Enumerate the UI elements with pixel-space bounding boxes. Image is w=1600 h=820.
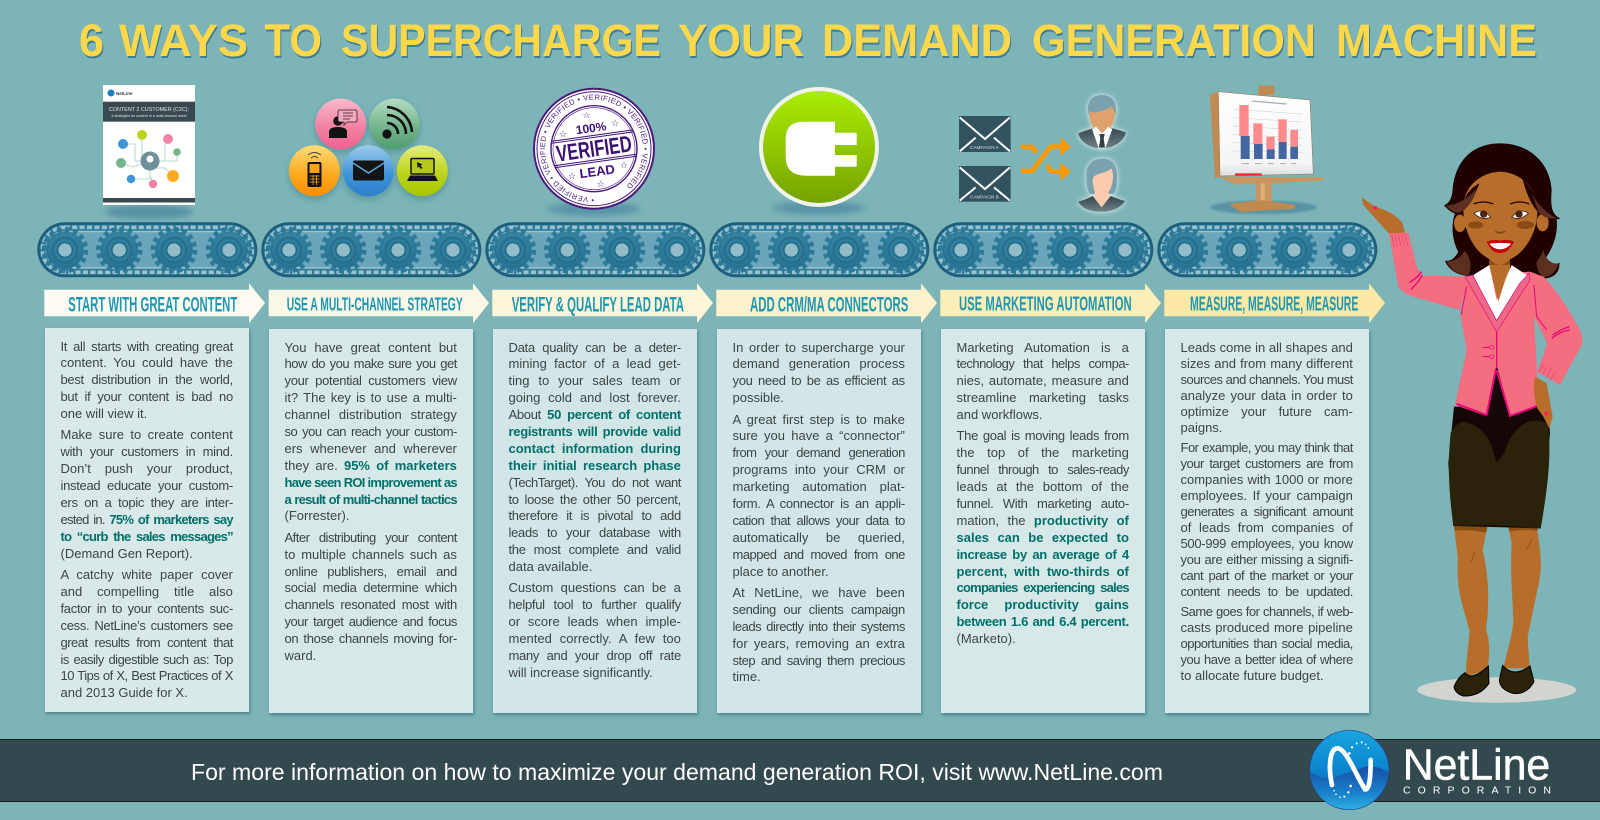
panel: add crm/ma connectors: time. — [732, 669, 761, 684]
panel: measure, measure, measure: companies with 1000 or more — [1180, 472, 1353, 486]
icon: social bubble — [315, 98, 366, 150]
panel: add crm/ma connectors: possible. — [732, 390, 784, 405]
title: TO — [264, 15, 322, 66]
panel: measure, measure, measure: 500-999 employees, you know — [1180, 536, 1353, 550]
panel: use a multi-channel strategy: online publishers, email and — [284, 564, 457, 579]
title: YOUR — [678, 15, 804, 66]
panel: verify and qualify lead data: to loose the other 50 percent, — [508, 492, 681, 507]
icon: chart easel — [1210, 86, 1323, 214]
panel: start with great content: A catchy white paper cover — [60, 567, 233, 582]
panel: use a multi-channel strategy: a result of multi-channel tactics — [284, 492, 457, 507]
title: GENERATION — [1032, 15, 1316, 66]
arrow heading: use a multi-channel strategy — [269, 283, 489, 323]
panel: use marketing automation: (Marketo). — [956, 631, 1016, 646]
panel: add crm/ma connectors: sure you have a “connector” — [732, 428, 905, 443]
panel: add crm/ma connectors: demand generation process — [732, 356, 905, 371]
arrow heading: add crm/ma connectors — [716, 283, 937, 323]
title — [79, 15, 1537, 66]
panel: measure, measure, measure: you have a better idea of where — [1180, 652, 1353, 666]
panel: add crm/ma connectors: A great first step is to make — [732, 412, 905, 427]
panel: measure, measure, measure: you are either missing a signifi- — [1180, 552, 1353, 566]
panel: start with great content: best distribution in the world, — [60, 372, 233, 387]
arrow heading: measure, measure, measure: MEASURE, MEASURE, MEASURE — [1190, 294, 1358, 316]
icon: verified lead stamp: 100% — [575, 119, 608, 137]
panel: verify and qualify lead data: ting to your sales team or — [508, 373, 681, 388]
panel: add crm/ma connectors: mapped and moved from one — [732, 547, 905, 562]
panel: add crm/ma connectors — [717, 329, 921, 713]
title: SUPERCHARGE — [341, 15, 661, 66]
panel: add crm/ma connectors: programs into your CRM or — [732, 462, 905, 477]
panel: use marketing automation: leads at the bottom of the — [956, 479, 1129, 494]
panel: start with great content: cess. NetLine’s customers see — [60, 618, 233, 633]
panel: start with great content: and compelling title also — [60, 584, 233, 599]
face — [1446, 172, 1558, 277]
icon: email bubble — [343, 145, 394, 196]
icon: verified lead stamp: LEAD — [579, 161, 616, 181]
panel: verify and qualify lead data: going cold and lost forever. — [508, 390, 681, 405]
arrow heading: measure, measure, measure — [1164, 283, 1385, 323]
panel: verify and qualify lead data: their initial research phase — [508, 458, 681, 473]
panel: measure, measure, measure: opportunities than social media, — [1180, 636, 1353, 650]
panel: use a multi-channel strategy: You have great content but — [284, 340, 457, 354]
logo wordmark: NetLine — [1403, 740, 1550, 789]
panel: use marketing automation: mation, the productivity of — [956, 513, 1129, 528]
panel: start with great content: It all starts with creating great — [60, 338, 233, 354]
arrow heading: start with great content: START WITH GREAT CONTENT — [68, 294, 237, 317]
arrow heading: use marketing automation: USE MARKETING AUTOMATION — [959, 293, 1132, 316]
panel: use marketing automation: streamline marketing tasks — [956, 390, 1129, 405]
panel: add crm/ma connectors: for years, removing an extra — [732, 636, 905, 651]
panel: use a multi-channel strategy: your target audience and focus — [284, 614, 457, 629]
icon: white paper cover: CONTENT 2 CUSTOMER (C2C): — [109, 107, 189, 113]
icon: woman — [1078, 159, 1125, 212]
panel: start with great content: ers on a topic they are inter- — [60, 495, 233, 510]
panel: use marketing automation: between 1.6 and 6.4 percent. — [956, 614, 1129, 629]
panel: verify and qualify lead data: helpful tool to further qualify — [508, 597, 681, 612]
panel: add crm/ma connectors: step and saving them precious — [732, 653, 905, 668]
icon: verified lead stamp: ☆ — [568, 172, 576, 182]
title: DEMAND — [822, 15, 1012, 66]
jacket — [1455, 272, 1582, 417]
panel: verify and qualify lead data: Data quality can be a deter- — [508, 340, 681, 354]
icon: white paper cover: 3 strategies for content in a multi-channel world — [111, 114, 187, 118]
panel: measure, measure, measure: optimize your future cam- — [1180, 404, 1353, 418]
panel: measure, measure, measure: employees. If your campaign — [1180, 488, 1353, 502]
conveyor: step 1 — [37, 222, 257, 277]
icon: channel bubbles — [288, 98, 448, 200]
panel: measure, measure, measure: paigns. — [1180, 420, 1222, 434]
panel: start with great content: with your customers in mind. — [60, 444, 233, 459]
panel: verify and qualify lead data: many and your drop off rate — [508, 648, 681, 663]
panel: use marketing automation: force productivity gains — [956, 597, 1129, 612]
arrow heading: use a multi-channel strategy: USE A MULTI-CHANNEL STRATEGY — [287, 294, 463, 315]
panel: use marketing automation: and workflows. — [956, 407, 1042, 422]
panel: measure, measure, measure — [1165, 329, 1369, 713]
panel: use marketing automation: companies experiencing sales — [956, 580, 1129, 595]
panel: use a multi-channel strategy: how do you make sure you get — [284, 356, 457, 371]
icon: verified lead stamp: ☆ — [559, 130, 567, 140]
icon: white paper cover: NetLine — [116, 91, 133, 96]
panel: add crm/ma connectors: from your demand generation — [732, 445, 905, 460]
panel: verify and qualify lead data: registrants will provide valid — [508, 424, 681, 439]
logo: NetLine — [1310, 730, 1551, 810]
panel: use a multi-channel strategy: they are. 95% of marketers — [284, 458, 457, 473]
icon: verified lead stamp: ☆ — [582, 111, 591, 121]
panel: use a multi-channel strategy: to multiple channels such as — [284, 547, 457, 562]
panel: verify and qualify lead data: contact information during — [508, 441, 681, 456]
panel: verify and qualify lead data: the most complete and valid — [508, 542, 681, 557]
panel: use marketing automation: nies, automate, measure and — [956, 373, 1129, 388]
panel: start with great content: content. You could have the — [60, 355, 233, 370]
arrow heading: add crm/ma connectors: ADD CRM/MA CONNECTORS — [750, 294, 908, 317]
panel: verify and qualify lead data: mented correctly. A few too — [508, 631, 681, 646]
panel: measure, measure, measure: analyze your data in order to — [1180, 388, 1353, 402]
panel: measure, measure, measure: casts produced more pipeline — [1180, 620, 1353, 634]
panel: use marketing automation: funnel. With marketing auto- — [956, 496, 1129, 511]
panel: start with great content: to “curb the sales messages” — [60, 529, 233, 544]
icon: campaign A envelope: CAMPAIGN A — [970, 145, 1000, 150]
icon: verified lead stamp: ☆ — [596, 180, 605, 190]
icon: campaign B envelope: CAMPAIGN B — [970, 195, 999, 200]
panel: measure, measure, measure: of leads from companies of — [1180, 520, 1353, 534]
panel: start with great content: one will view it. — [60, 406, 147, 421]
panel: start with great content: and 2013 Guide for X. — [60, 685, 188, 700]
panel: verify and qualify lead data: or score leads when imple- — [508, 614, 681, 629]
arm raised — [1362, 197, 1467, 310]
panel: use a multi-channel strategy: ers whenever and wherever — [284, 441, 457, 456]
conveyor: step 3 — [485, 222, 705, 277]
panel: use marketing automation: percent, with two-thirds of — [956, 564, 1129, 579]
upper body — [1362, 143, 1582, 428]
icon: verified lead stamp: ☆ — [620, 161, 628, 171]
conveyor: step 2 — [261, 222, 481, 277]
panel: start with great content: Don’t push your product, — [60, 461, 233, 476]
panel: measure, measure, measure: content needs to be updated. — [1180, 584, 1353, 598]
panel: start with great content: ested in. 75% of marketers say — [60, 512, 233, 527]
icon: rss bubble — [369, 98, 420, 150]
icon: white paper cover — [103, 85, 195, 219]
panel: verify and qualify lead data: (TechTarget). You do not want — [508, 475, 681, 490]
panel: use marketing automation: the top of the marketing — [956, 445, 1129, 460]
panel: add crm/ma connectors: automatically be queried, — [732, 530, 905, 545]
panel: measure, measure, measure: Same goes for channels, if web- — [1180, 604, 1353, 618]
panel: verify and qualify lead data: will increase significantly. — [508, 665, 653, 680]
icon: green plug connector — [759, 87, 879, 214]
panel: measure, measure, measure: generates a significant amount — [1180, 504, 1353, 518]
floor shadow — [1417, 677, 1576, 703]
panel: verify and qualify lead data: About 50 percent of content — [508, 407, 681, 422]
panel: verify and qualify lead data — [493, 329, 697, 713]
panel: start with great content: 10 Tips of X, Best Practices of X — [60, 668, 233, 683]
conveyor: step 6 — [1157, 222, 1377, 277]
lower body — [1448, 407, 1550, 696]
neck — [1489, 253, 1510, 303]
panel: start with great content: but if your content is bad no — [60, 389, 233, 404]
panel: use a multi-channel strategy: so you can reach your custom- — [284, 424, 457, 439]
panel: use marketing automation: increase by an average of 4 — [956, 547, 1129, 562]
arrow heading: verify and qualify lead data — [492, 283, 713, 323]
panel: use a multi-channel strategy: After distributing your content — [284, 530, 457, 545]
panel: use a multi-channel strategy: on those channels moving for- — [284, 631, 457, 646]
panel: measure, measure, measure: Leads come in all shapes and — [1180, 340, 1353, 354]
panel: verify and qualify lead data: Custom questions can be a — [508, 580, 681, 595]
icon: A/B campaign — [959, 95, 1126, 212]
panel: use marketing automation: sales can be expected to — [956, 530, 1129, 545]
panel: add crm/ma connectors: In order to supercharge your — [732, 340, 905, 354]
panel: start with great content — [45, 328, 249, 712]
panel: add crm/ma connectors: At NetLine, we have been — [732, 585, 905, 600]
panel: start with great content: Make sure to create content — [60, 427, 233, 442]
panel: measure, measure, measure: For example, you may think that — [1180, 440, 1353, 454]
panel: verify and qualify lead data: therefore it is pivotal to add — [508, 508, 681, 523]
hair — [1444, 143, 1561, 278]
hand on hip — [1534, 377, 1553, 428]
panel: add crm/ma connectors: form. A connector is an appli- — [732, 496, 905, 511]
panel: add crm/ma connectors: cation that allows your data to — [732, 513, 905, 528]
icon: verified lead stamp: VERIFIED — [555, 130, 633, 167]
icon: mobile bubble — [289, 145, 340, 196]
conveyor: step 4 — [709, 222, 929, 277]
panel: measure, measure, measure: cant part of the market or your — [1180, 568, 1353, 582]
panel: measure, measure, measure: sizes and from many different — [1180, 356, 1353, 370]
panel: use marketing automation — [941, 329, 1145, 713]
panel: use a multi-channel strategy: have seen ROI improvement as — [284, 475, 457, 490]
panel: use marketing automation: Marketing Automation is a — [956, 340, 1129, 354]
panel: verify and qualify lead data: mining factor of a lead get- — [508, 356, 681, 371]
panel: add crm/ma connectors: place to another. — [732, 564, 829, 579]
panel: add crm/ma connectors: marketing automation plat- — [732, 479, 905, 494]
conveyor: step 5 — [933, 222, 1153, 277]
panel: use marketing automation: technology that helps compa- — [956, 356, 1129, 371]
icon: man — [1078, 95, 1126, 148]
icon: verified lead stamp: • VERIFIED • VERIFIED • VERIFIED • VERIFIED • VERIFIED • VERIFIED — [540, 94, 648, 203]
panel: start with great content: is easily digestible such as: Top — [60, 652, 233, 667]
icon: NetLine globe — [1310, 730, 1389, 810]
shirt — [1473, 265, 1529, 320]
panel: use a multi-channel strategy: ward. — [284, 648, 316, 663]
icon: laptop bubble — [397, 145, 448, 196]
arrow heading: verify and qualify lead data: VERIFY & QUALIFY LEAD DATA — [512, 294, 684, 317]
panel: start with great content: instead educate your custom- — [60, 478, 233, 493]
title: WAYS — [119, 15, 248, 66]
panel: use marketing automation: The goal is moving leads from — [956, 428, 1129, 443]
icon: campaign A envelope — [959, 116, 1011, 152]
panel: use a multi-channel strategy: it? The key is to use a multi- — [284, 390, 457, 405]
panel: measure, measure, measure: to allocate future budget. — [1180, 668, 1324, 682]
illustration: businesswoman — [1362, 143, 1582, 703]
panel: use a multi-channel strategy: your potential customers view — [284, 373, 457, 388]
logo subtitle: CORPORATION — [1403, 784, 1551, 796]
footer text: For more information on how to maximize your demand generation ROI, visit www.NetLine.com — [191, 759, 1163, 785]
lapel — [1465, 273, 1530, 332]
arrow heading: use marketing automation — [940, 283, 1161, 323]
panel: use a multi-channel strategy: (Forrester). — [284, 508, 350, 523]
panel: start with great content: great results from content that — [60, 635, 233, 650]
arrow heading: start with great content — [44, 283, 265, 323]
arrow: shuffle — [1021, 137, 1071, 181]
icon: campaign B envelope — [959, 166, 1011, 202]
icon: verified lead stamp: ☆ — [611, 119, 619, 129]
panel: use marketing automation: funnel through to sales-ready — [956, 462, 1129, 477]
panel: measure, measure, measure: sources and channels. You must — [1180, 372, 1353, 386]
panel: use a multi-channel strategy — [269, 329, 473, 713]
panel: add crm/ma connectors: sending our clients campaign — [732, 602, 905, 617]
panel: verify and qualify lead data: data available. — [508, 559, 592, 574]
panel: add crm/ma connectors: you need to be as efficient as — [732, 373, 905, 388]
panel: verify and qualify lead data: leads to your database with — [508, 525, 681, 540]
panel: start with great content: factor in to your contents suc- — [60, 601, 233, 616]
panel: use a multi-channel strategy: channel distribution strategy — [284, 407, 457, 422]
footer band — [0, 740, 1600, 802]
panel: use a multi-channel strategy: channels resonated most with — [284, 597, 457, 612]
panel: use a multi-channel strategy: social media determine which — [284, 580, 457, 595]
panel: start with great content: (Demand Gen Report). — [60, 546, 193, 561]
title: 6 — [79, 15, 104, 66]
title: MACHINE — [1336, 15, 1537, 66]
panel: measure, measure, measure: your target customers are from — [1180, 456, 1353, 470]
panel: add crm/ma connectors: leads directly into their systems — [732, 619, 905, 634]
